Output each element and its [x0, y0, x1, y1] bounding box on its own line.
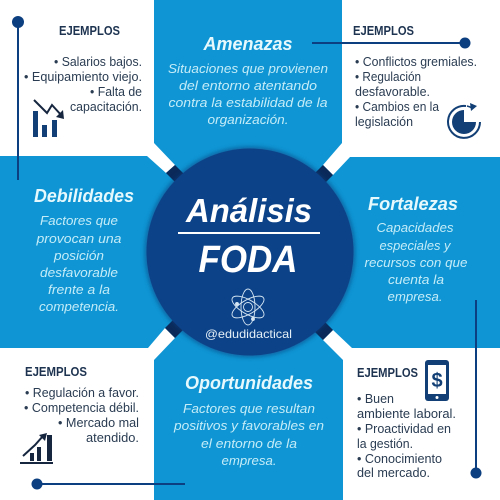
text: oportunidades: el entorno de la [201, 437, 297, 451]
text: fortalezas: especiales y [380, 239, 451, 253]
panel: oportunidades [173, 373, 324, 468]
text: lista amenazas: • Conflictos gremiales. [355, 55, 477, 69]
panel: oportunidades connector line [32, 478, 185, 490]
text: lista fortalezas: • Proactividad en [357, 422, 451, 436]
heading: debilidades: Debilidades [34, 186, 134, 206]
icon: atom logo [229, 289, 267, 325]
text: fortalezas: recursos con que [364, 256, 468, 270]
divider line [178, 232, 320, 234]
panel: debilidades [34, 186, 134, 314]
heading: ejemplos fortalezas: EJEMPLOS [357, 365, 418, 380]
text: amenazas [168, 62, 328, 127]
heading: ejemplos amenazas: EJEMPLOS [353, 23, 414, 38]
text: lista amenazas: desfavorable. [355, 85, 430, 99]
text: lista fortalezas: ambiente laboral. [357, 407, 456, 421]
text: debilidades: competencia. [39, 300, 119, 314]
panel: ejemplos oportunidades [20, 364, 139, 464]
text: debilidades: posición [53, 249, 104, 263]
text: fortalezas [364, 221, 468, 304]
text: lista debilidades: • Equipamiento viejo. [24, 70, 142, 84]
text: lista amenazas: • Cambios en la [355, 100, 439, 114]
text: lista oportunidades: • Competencia débil. [24, 401, 139, 415]
text: lista fortalezas: • Buen [357, 392, 394, 406]
text: handle: @edudidactical [205, 327, 292, 341]
text: debilidades: desfavorable [40, 266, 118, 280]
text: oportunidades [173, 402, 324, 468]
text: debilidades: Factores que [40, 214, 118, 228]
panel: amenazas [168, 34, 328, 127]
heading: ejemplos oportunidades: EJEMPLOS [25, 364, 87, 379]
text: lista fortalezas: del mercado. [357, 466, 430, 480]
text: lista debilidades: • Falta de [90, 85, 142, 99]
text: lista amenazas: • Regulación [355, 70, 421, 84]
icon: falling bar chart [33, 100, 64, 137]
panel: ejemplos fortalezas [357, 360, 456, 480]
icon: phone with dollar: $ [431, 370, 443, 392]
text: lista oportunidades: • Mercado mal [58, 416, 139, 430]
title: Análisis: Análisis [185, 192, 312, 229]
title: FODA: FODA [198, 239, 298, 281]
text: fortalezas: cuenta la [388, 273, 444, 287]
text: lista debilidades: • Salarios bajos. [54, 55, 142, 69]
text: amenazas: contra la estabilidad de la [168, 96, 328, 110]
panel: debilidades connector line [12, 16, 24, 180]
icon: pie chart cycle [448, 103, 480, 138]
panel: fortalezas [364, 194, 468, 304]
text: lista oportunidades: atendido. [86, 431, 139, 445]
text: lista oportunidades [24, 386, 139, 445]
panel: ejemplos debilidades [24, 23, 142, 137]
text: lista amenazas [355, 55, 477, 129]
text: lista oportunidades: • Regulación a favor. [25, 386, 139, 400]
text: amenazas: Situaciones que provienen [168, 62, 328, 76]
text: debilidades: provocan una [35, 232, 122, 246]
text: lista fortalezas [357, 392, 456, 480]
text: fortalezas: empresa. [388, 290, 442, 304]
text: oportunidades: empresa. [222, 454, 276, 468]
text: debilidades: frente a la [48, 283, 110, 297]
icon: rising bar chart [20, 433, 53, 464]
heading: amenazas: Amenazas [203, 34, 292, 54]
panel: amenazas connector line [312, 38, 470, 48]
text: lista fortalezas: la gestión. [357, 437, 413, 451]
text: lista debilidades: capacitación. [70, 100, 142, 114]
text: amenazas: organización. [208, 113, 288, 127]
center circle [145, 147, 355, 357]
text: debilidades [35, 214, 122, 314]
text: oportunidades: Factores que resultan [183, 402, 315, 416]
text: lista amenazas: legislación [355, 115, 413, 129]
text: lista fortalezas: • Conocimiento [357, 452, 442, 466]
text: amenazas: del entorno atentando [179, 79, 317, 93]
text: fortalezas: Capacidades [376, 221, 454, 235]
text: lista debilidades [24, 55, 142, 114]
panel: fortalezas connector line [470, 300, 482, 478]
heading: fortalezas: Fortalezas [368, 194, 458, 214]
panel: ejemplos amenazas [353, 23, 480, 138]
heading: ejemplos debilidades: EJEMPLOS [59, 23, 120, 38]
heading: oportunidades: Oportunidades [185, 373, 313, 393]
text: oportunidades: positivos y favorables en [173, 419, 324, 433]
